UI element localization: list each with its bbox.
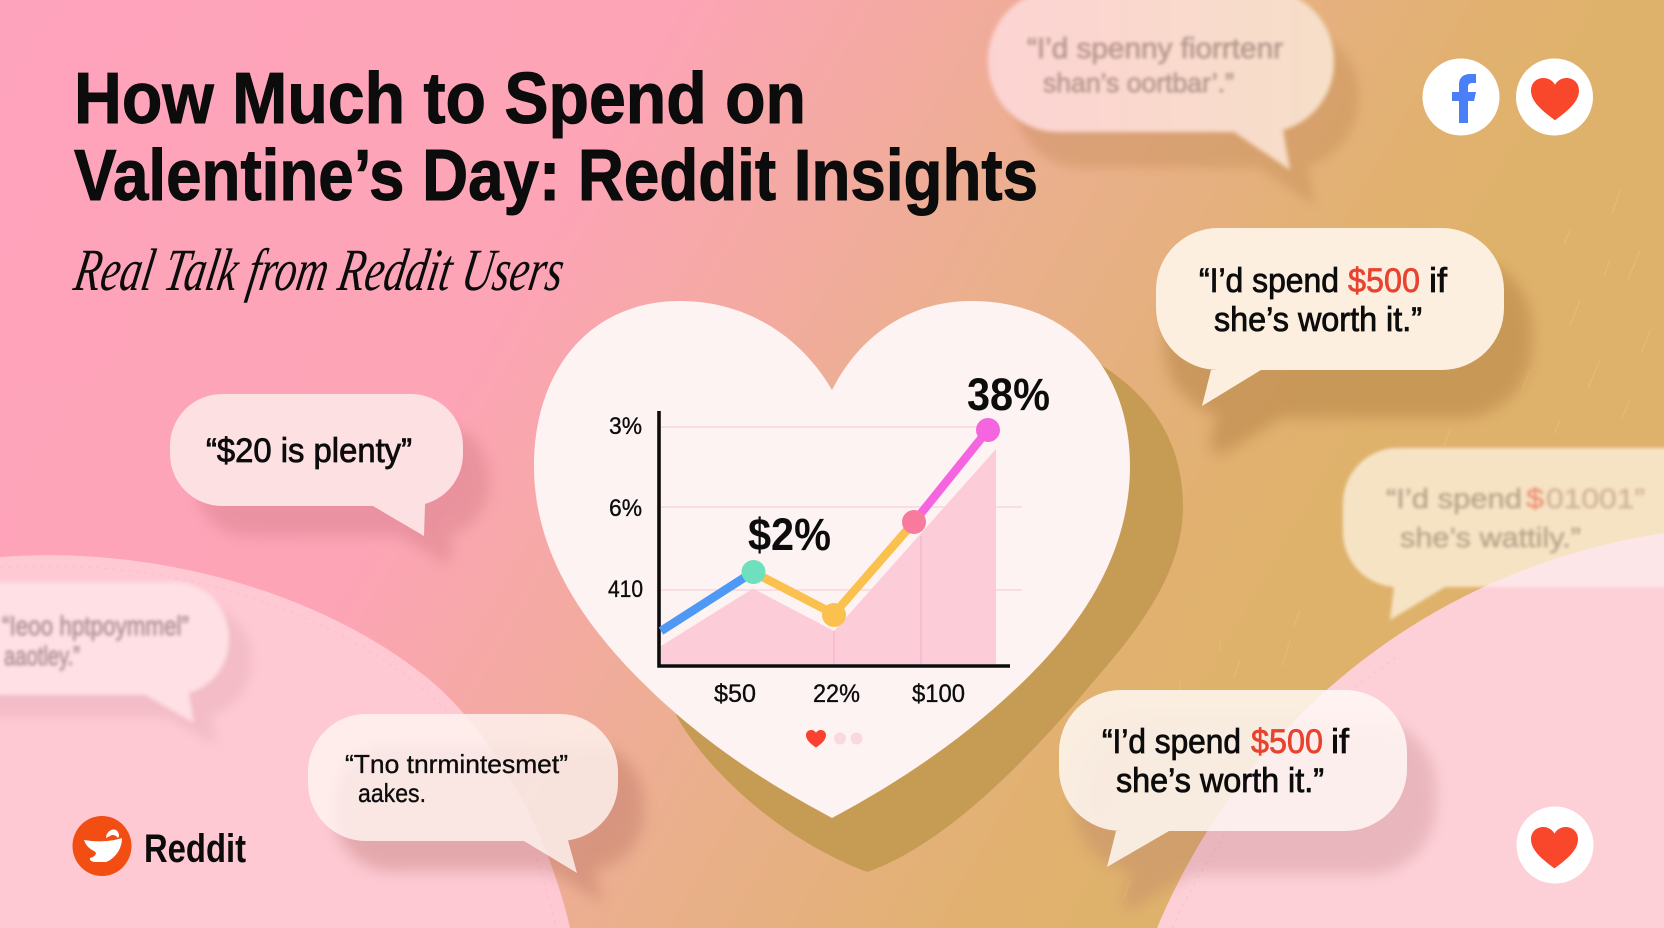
- chart gridlines: [661, 427, 1022, 590]
- value callout: $2%: $2%: [748, 509, 831, 560]
- value callout: 38%: 38%: [967, 369, 1050, 420]
- background blob: bottom left: [0, 555, 570, 928]
- speech bubble: top right $500: [1156, 228, 1522, 444]
- bubble shadow: [1081, 726, 1429, 903]
- blurred bubble body: top: [988, 0, 1334, 170]
- icon: heart badge top: [1516, 58, 1593, 136]
- bubble text: she’s worth it.”: [1116, 762, 1324, 800]
- x axis labels: [714, 680, 965, 708]
- data point: yellow: [822, 603, 846, 627]
- bubble text: [1102, 723, 1350, 800]
- bubble shadow: [196, 424, 489, 566]
- badge circle: [1422, 58, 1500, 136]
- bubble text: “Tno tnrmintesmet”: [345, 749, 568, 779]
- pagination heart: [806, 730, 826, 748]
- subtitle: Real Talk from Reddit Users: [69, 237, 569, 304]
- blob stitched edges: [0, 566, 1400, 928]
- pagination dot: [834, 732, 846, 744]
- bubble text: aakes.: [358, 778, 426, 808]
- icon: heart badge bottom: [1516, 806, 1594, 884]
- y axis labels: 410: [608, 576, 643, 603]
- blurred bubble shadow: top: [1013, 26, 1359, 206]
- bubble text: “$20 is plenty”: [206, 432, 412, 470]
- title line 2: Valentine’s Day: Reddit Insights: [74, 136, 1038, 216]
- facebook f: [1452, 74, 1476, 123]
- blurred bubble body: left: [0, 582, 229, 723]
- background blob: bottom right: [1157, 533, 1664, 928]
- blurred bubble seen through right blob: [1483, 533, 1664, 588]
- x axis labels: 22%: [813, 680, 860, 708]
- bubble text: “I’d spend: [1102, 723, 1241, 761]
- bubble text: $500: [1348, 262, 1420, 300]
- bubble text: $500: [1251, 723, 1323, 761]
- blurred bubble text: right: “I’d spend: [1386, 483, 1522, 514]
- line segment: blue: [661, 572, 753, 631]
- y axis labels: 6%: [609, 495, 642, 522]
- reddit icon swoosh: [106, 829, 119, 838]
- blurred bubble text: top: [1027, 33, 1283, 98]
- bubble shadow: [334, 744, 644, 903]
- bubble text: [345, 749, 568, 808]
- pagination dot: [850, 732, 862, 744]
- icon: facebook badge: [1422, 58, 1500, 136]
- blurred bubble text: top: shan’s oortbar’.”: [1043, 68, 1234, 98]
- bubble text: “I’d spend: [1199, 262, 1339, 300]
- chart: spending line chart: [608, 369, 1050, 708]
- pagination: heart and dots: [806, 730, 862, 748]
- bubble body: [170, 394, 463, 536]
- x axis labels: $100: [912, 680, 965, 708]
- bubble body: [1059, 690, 1407, 867]
- badge circle: [1516, 58, 1593, 136]
- blurred speech bubble: top: [988, 0, 1359, 206]
- reddit wordmark: Reddit: [144, 827, 246, 871]
- bubble body: [1156, 228, 1504, 406]
- speech bubble: $20 is plenty: [170, 394, 489, 566]
- blurred bubble text: right: [1386, 483, 1645, 553]
- chart axes: [659, 411, 1010, 666]
- blurred bubble text: top: “I’d spenny fiorrtenr: [1027, 33, 1283, 65]
- heart: [1531, 827, 1578, 868]
- speech bubble: bottom center: [308, 714, 644, 903]
- title: [74, 59, 1038, 216]
- badge circle: [1516, 806, 1594, 884]
- x axis labels: $50: [714, 680, 756, 708]
- chart vertical guides: [834, 536, 921, 664]
- blurred speech bubble: left: [0, 582, 251, 745]
- speech bubble: bottom right $500: [1059, 690, 1429, 903]
- bubble text: she’s worth it.”: [1214, 301, 1422, 339]
- bubble text: if: [1429, 262, 1448, 300]
- background texture strokes: [1124, 190, 1650, 916]
- blurred bubble text: left: aaotley.”: [4, 641, 80, 671]
- data point: pink: [902, 510, 926, 534]
- heart: [1531, 78, 1579, 120]
- reddit icon bowl: [84, 838, 122, 862]
- reddit icon circle: [72, 816, 132, 876]
- heart drop shadow: [676, 363, 1183, 872]
- blurred bubble body: right: [1343, 448, 1664, 620]
- blurred bubble text: left: [2, 611, 189, 671]
- reddit logo: [72, 816, 246, 876]
- line segment: yellow: [753, 522, 914, 614]
- blurred bubble text: right: 01001”: [1546, 483, 1645, 514]
- line segment: magenta: [914, 430, 988, 522]
- bubble text: if: [1331, 723, 1350, 761]
- heart panel: [534, 301, 1130, 818]
- data point: magenta: [976, 418, 1000, 442]
- bubble body: [308, 714, 618, 873]
- bubble text: [1199, 262, 1448, 339]
- blurred bubble text: left: “Ieoo hptpoymmel”: [2, 611, 189, 641]
- blurred bubble text: right: she’s wattily.”: [1400, 522, 1581, 553]
- bubble shadow: [1174, 266, 1522, 444]
- data point: teal: [742, 560, 766, 584]
- blurred bubble text: right: $: [1526, 483, 1544, 514]
- blurred bubble shadow: left: [0, 604, 251, 745]
- title line 1: How Much to Spend on: [74, 59, 806, 139]
- y axis labels: 3%: [609, 413, 642, 440]
- y axis labels: [608, 413, 643, 603]
- chart area fill: [661, 449, 996, 664]
- blurred speech bubble: right: [1343, 448, 1664, 620]
